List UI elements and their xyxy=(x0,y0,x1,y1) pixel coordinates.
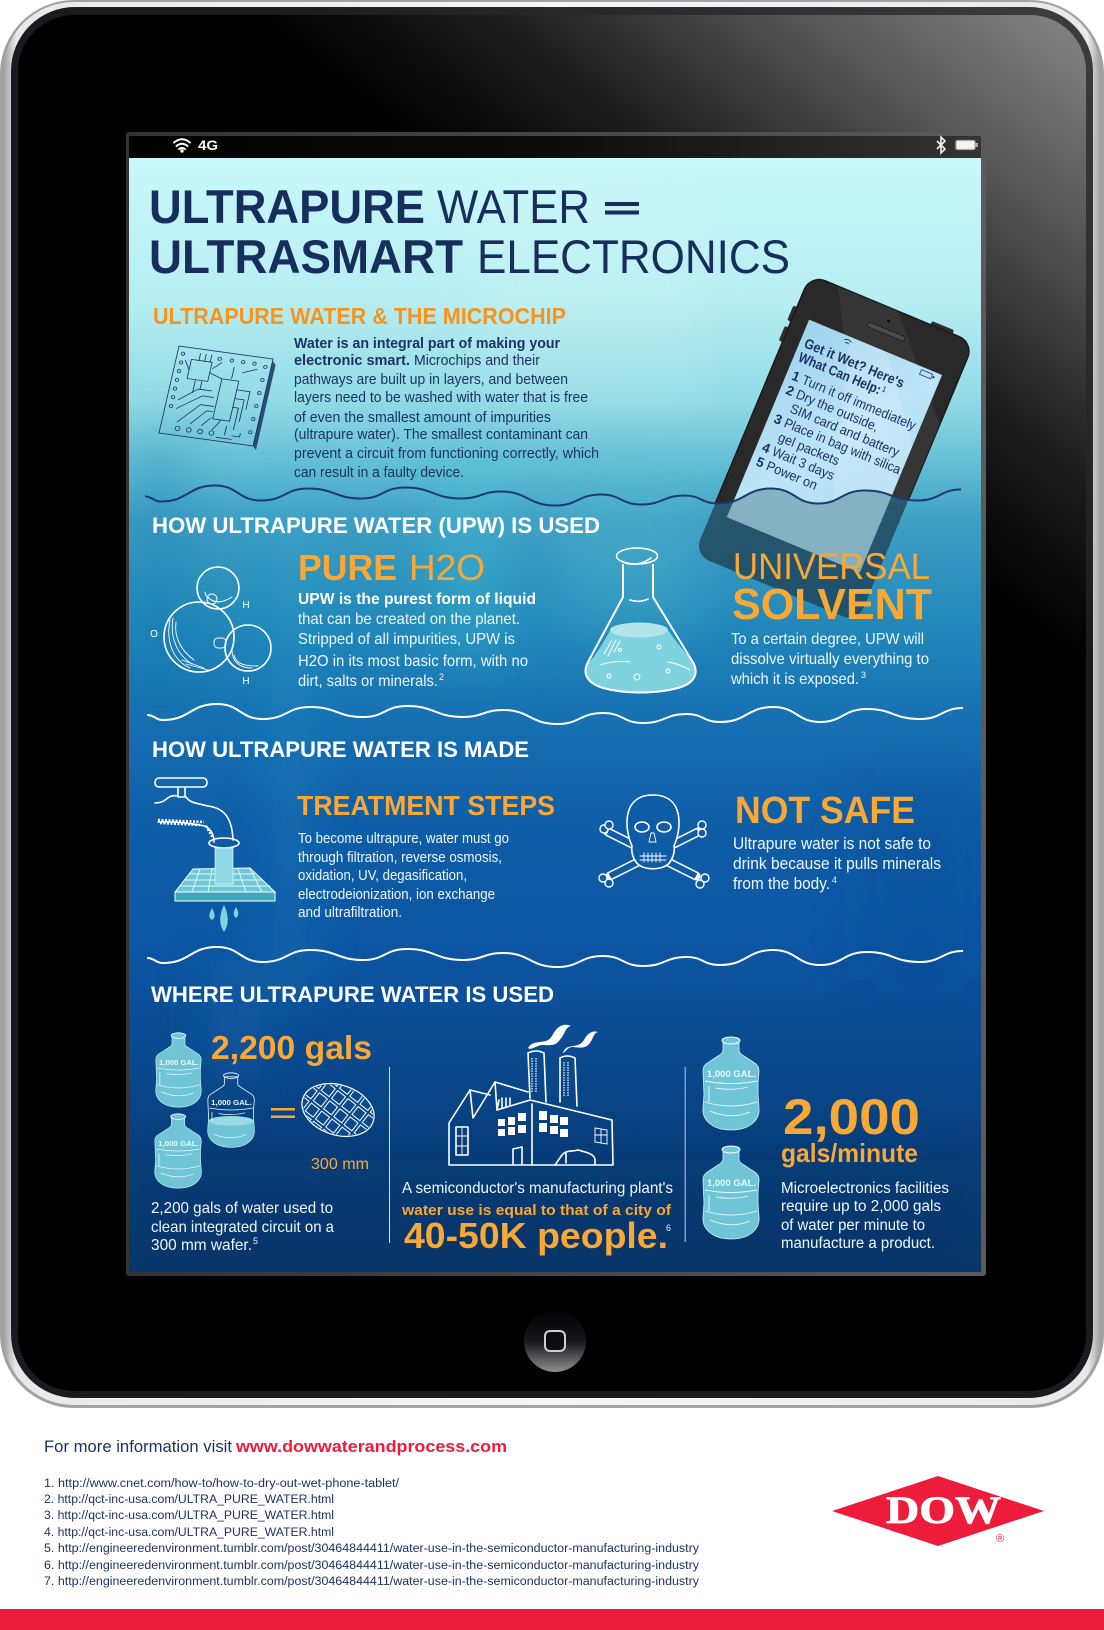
icon: factory with smoke xyxy=(449,1025,613,1165)
icon: water jug three xyxy=(155,1114,201,1188)
paragraph: facilities: manufacture a product. xyxy=(781,1235,935,1252)
paragraph: of even the smallest amount of impurities xyxy=(294,410,551,426)
panel: ultrapure water and the microchip xyxy=(153,303,599,481)
paragraph: not safe: 4 xyxy=(832,875,837,885)
phone screen text: 2 xyxy=(784,382,796,399)
screen content xyxy=(129,158,981,1272)
paragraph: electronic smart. xyxy=(294,353,410,369)
title: WATER xyxy=(437,180,590,233)
paragraph: not safe xyxy=(733,835,941,893)
paragraph: plant: A semiconductor's manufacturing plant's xyxy=(402,1180,673,1197)
paragraph: not safe: from the body. xyxy=(733,875,830,893)
title: ULTRASMART xyxy=(149,230,463,283)
paragraph: universal solvent: 3 xyxy=(861,670,866,680)
icon: equals sign xyxy=(271,1108,295,1118)
icon: water jug five: 1,000 GAL. xyxy=(707,1178,756,1189)
paragraph: pure h2o: dirt, salts or minerals. xyxy=(298,673,438,690)
paragraph: pure h2o xyxy=(298,591,536,690)
title: ELECTRONICS xyxy=(477,230,790,283)
icon: water molecule: O xyxy=(150,629,158,640)
paragraph: treatment steps: and ultrafiltration. xyxy=(298,905,402,921)
paragraph: facilities xyxy=(781,1180,949,1252)
panel: how ultrapure water is made xyxy=(152,737,941,932)
home button xyxy=(524,1310,586,1372)
stat: 2,200 gals: 2,200 gals xyxy=(211,1029,372,1066)
icon: water jug four xyxy=(703,1037,759,1130)
phone screen text: 1 xyxy=(790,368,803,385)
heading: HOW ULTRAPURE WATER (UPW) IS USED xyxy=(152,513,600,538)
phone screen text: What Can Help: xyxy=(796,349,884,397)
icon: bluetooth xyxy=(937,137,945,153)
label: 4G: 4G xyxy=(198,137,218,153)
logo: Dow diamond xyxy=(832,1476,1044,1546)
paragraph: Microchips and their xyxy=(414,353,540,369)
paragraph: treatment steps: To become ultrapure, water must go xyxy=(298,831,509,847)
stat: 2,000 gals per minute: gals/minute xyxy=(781,1138,918,1168)
screen water background xyxy=(129,158,981,1272)
footer: source list: 6. http://engineeredenvironment.tumblr.com/post/30464844411/water-use-in-the-semiconductor-manufacturing-industry xyxy=(44,1560,699,1572)
icon: water jug partly full xyxy=(208,1073,254,1147)
status bar xyxy=(129,136,981,158)
footer: more information: www.dowwaterandprocess.com xyxy=(235,1438,507,1456)
panel: where ultrapure water is used xyxy=(151,982,949,1256)
phone screen text: 5 xyxy=(754,454,767,471)
stat: 2,000 gals per minute: 2,000 xyxy=(783,1089,920,1145)
icon: water jug partly full: 1,000 GAL. xyxy=(211,1098,252,1107)
paragraph: treatment steps xyxy=(298,831,509,921)
phone screen text: Place in bag with silica xyxy=(782,415,904,477)
title xyxy=(149,180,790,283)
paragraph: universal solvent: dissolve virtually everything to xyxy=(731,651,929,668)
phone screen text: 3 xyxy=(772,411,785,428)
paragraph: treatment steps: oxidation, UV, degasification, xyxy=(298,868,467,884)
stat: 2,000 gals per minute xyxy=(781,1089,920,1168)
icon: flask xyxy=(585,548,696,692)
paragraph: facilities: require up to 2,000 gals xyxy=(781,1198,941,1215)
phone screen text: gel packets xyxy=(776,430,842,468)
paragraph: wafer: 2,200 gals of water used to xyxy=(151,1200,333,1217)
icon: water jug four: 1,000 GAL. xyxy=(707,1069,756,1080)
footer: source list xyxy=(44,1478,699,1588)
footer: source list: 5. http://engineeredenvironment.tumblr.com/post/30464844411/water-use-in-the-semiconductor-manufacturing-industry xyxy=(44,1543,699,1555)
phone screen text: SIM card and battery xyxy=(788,401,902,460)
panel: how ultrapure water is used xyxy=(150,513,932,692)
illustration: phone half submerged xyxy=(690,269,975,622)
paragraph: universal solvent xyxy=(730,631,929,688)
paragraph: pure h2o: UPW is the purest form of liquid xyxy=(298,591,536,608)
paragraph: facilities: of water per minute to xyxy=(781,1217,925,1234)
footer: source list: 2. http://qct-inc-usa.com/ULTRA_PURE_WATER.html xyxy=(44,1494,334,1506)
icon: water jug five xyxy=(703,1146,759,1239)
wave: white divider one xyxy=(147,704,963,724)
icon: faucet xyxy=(155,778,275,932)
paragraph: not safe: Ultrapure water is not safe to xyxy=(733,835,931,853)
paragraph: Water is an integral part of making your xyxy=(294,336,560,352)
paragraph: pure h2o: 2 xyxy=(439,672,444,682)
paragraph: treatment steps: electrodeionization, ion exchange xyxy=(298,887,495,903)
phone screen text: 4 xyxy=(760,440,773,457)
heading: universal solvent: SOLVENT xyxy=(732,580,932,629)
heading: pure h2o: PURE xyxy=(298,547,397,588)
phone screen text: Dry the outside, xyxy=(794,387,881,434)
paragraph: plant: water use is equal to that of a city of xyxy=(401,1202,672,1219)
icon: circuit board xyxy=(158,346,277,450)
footer: source list: 1. http://www.cnet.com/how-to/how-to-dry-out-wet-phone-tablet/ xyxy=(44,1478,400,1490)
paragraph: treatment steps: through filtration, reverse osmosis, xyxy=(298,850,502,866)
paragraph: not safe: drink because it pulls minerals xyxy=(733,855,941,873)
phone screen text: Power on xyxy=(764,458,820,493)
paragraph: plant xyxy=(401,1180,673,1256)
paragraph: (ultrapure water). The smallest contaminant can xyxy=(294,427,588,443)
heading: universal solvent xyxy=(732,546,932,629)
logo: Dow diamond: ® xyxy=(996,1533,1004,1545)
icon: wifi xyxy=(174,139,190,152)
paragraph: plant: 6 xyxy=(666,1223,671,1233)
icon: silicon wafer xyxy=(301,1082,375,1138)
icon: water molecule xyxy=(150,567,271,687)
heading: not safe: NOT SAFE xyxy=(735,790,915,832)
icon: water jug one: 1,000 GAL. xyxy=(159,1058,199,1067)
paragraph: wafer xyxy=(151,1200,334,1254)
label: 300 mm: 300 mm xyxy=(311,1156,369,1173)
phone screen text xyxy=(753,335,935,520)
wave: navy water line xyxy=(145,486,961,506)
heading: pure h2o: H2O xyxy=(409,547,485,588)
footer: more information: For more information visit xyxy=(44,1438,232,1456)
phone underwater ghost xyxy=(698,490,908,618)
footer: source list: 7. http://engineeredenvironment.tumblr.com/post/30464844411/water-use-in-the-semiconductor-manufacturing-industry xyxy=(44,1576,699,1588)
paragraph: universal solvent: To a certain degree, UPW will xyxy=(731,631,924,648)
paragraph: can result in a faulty device. xyxy=(294,465,464,481)
heading: universal solvent: UNIVERSAL xyxy=(733,546,930,587)
phone screen text: Turn it off immediately xyxy=(800,372,918,433)
footer: more information xyxy=(44,1438,507,1456)
phone above water xyxy=(714,278,970,502)
heading: HOW ULTRAPURE WATER IS MADE xyxy=(152,737,529,762)
icon: water molecule: H xyxy=(242,676,250,687)
paragraph: pure h2o: H2O in its most basic form, with no xyxy=(298,653,528,670)
paragraph: wafer: clean integrated circuit on a xyxy=(151,1219,334,1236)
heading: ULTRAPURE WATER & THE MICROCHIP xyxy=(153,303,566,329)
divider one xyxy=(389,1067,390,1243)
paragraph: pathways are built up in layers, and between xyxy=(294,372,568,388)
footer red band xyxy=(0,1609,1104,1630)
paragraph: layers need to be washed with water that is free xyxy=(294,390,588,406)
paragraph: facilities: Microelectronics facilities xyxy=(781,1180,949,1197)
paragraph xyxy=(294,336,599,481)
paragraph: pure h2o: Stripped of all impurities, UPW is xyxy=(298,631,515,648)
icon: skull and crossbones xyxy=(599,795,709,888)
paragraph: wafer: 5 xyxy=(253,1236,258,1246)
screen frame xyxy=(126,132,986,1276)
divider two xyxy=(684,1067,686,1242)
heading: WHERE ULTRAPURE WATER IS USED xyxy=(151,982,554,1007)
icon: water molecule: H xyxy=(242,600,250,611)
icon: water jug one xyxy=(156,1033,201,1107)
icon: battery xyxy=(956,140,978,150)
paragraph: prevent a circuit from functioning correctly, which xyxy=(294,446,599,462)
paragraph: pure h2o: that can be created on the planet. xyxy=(298,611,520,628)
title: ULTRAPURE xyxy=(149,180,425,233)
paragraph: universal solvent: which it is exposed. xyxy=(730,671,859,688)
heading: treatment steps: TREATMENT STEPS xyxy=(297,790,555,821)
footer: source list: 4. http://qct-inc-usa.com/ULTRA_PURE_WATER.html xyxy=(44,1527,334,1539)
phone screen text: 1 xyxy=(880,384,889,395)
paragraph: plant: 40-50K people. xyxy=(404,1215,668,1256)
heading: pure h2o xyxy=(298,547,485,588)
wave: white divider two xyxy=(147,947,963,967)
icon: water jug three: 1,000 GAL. xyxy=(158,1139,199,1148)
paragraph: wafer: 300 mm wafer. xyxy=(151,1237,252,1254)
footer: source list: 3. http://qct-inc-usa.com/ULTRA_PURE_WATER.html xyxy=(44,1510,334,1522)
phone screen text: Wait 3 days xyxy=(770,444,837,483)
logo: Dow diamond: DOW xyxy=(886,1489,1001,1532)
phone screen text: Get it Wet? Here's xyxy=(802,335,907,391)
